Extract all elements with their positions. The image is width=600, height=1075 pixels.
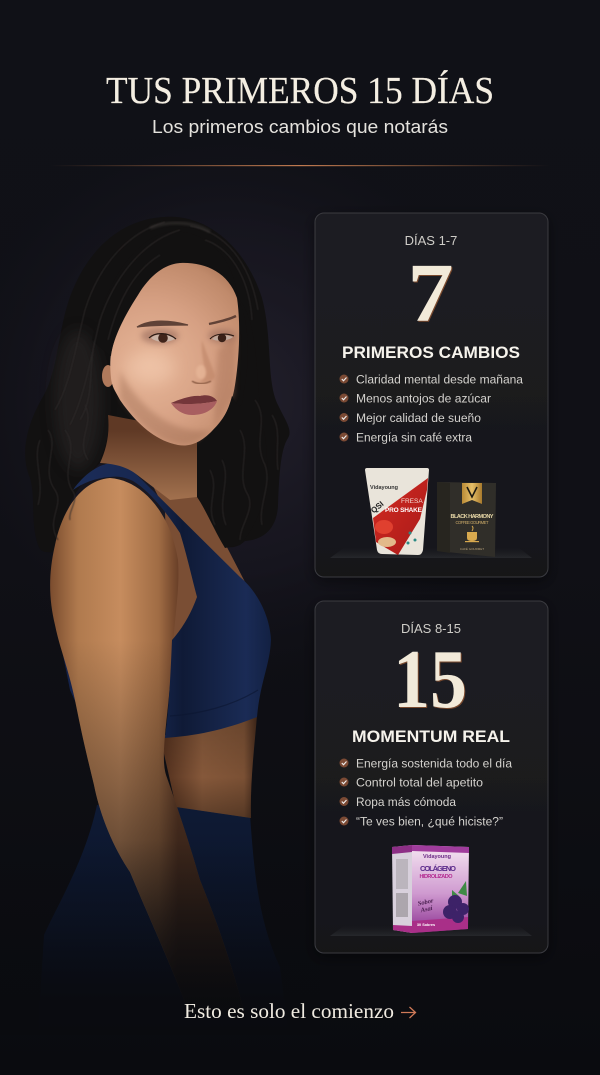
- back of top: [60, 640, 80, 712]
- item 4: Energía sin café extra: [356, 430, 472, 444]
- product: Black Harmony box: [437, 482, 496, 557]
- subtitle: Los primeros cambios que notarás: [152, 117, 448, 137]
- product: Pro Shake pouch: PRO SHAKE: [385, 507, 423, 514]
- card background: [315, 601, 548, 953]
- header divider: [50, 165, 550, 166]
- card background: [315, 213, 548, 577]
- midriff: [160, 716, 257, 818]
- product: collagen box: [392, 845, 469, 933]
- neck: [100, 415, 197, 500]
- closing call to action: Esto es solo el comienzo: [184, 999, 394, 1023]
- item 1: Claridad mental desde mañana: [356, 372, 523, 386]
- product shelf: [330, 547, 532, 558]
- hair sheen: [54, 330, 102, 470]
- arrow: [401, 1007, 416, 1018]
- period label: DÍAS 1-7: [405, 233, 457, 248]
- right cheek shade: [214, 335, 236, 428]
- top band shading: [170, 690, 258, 716]
- right eyebrow: [209, 316, 236, 324]
- item 3: Mejor calidad de sueño: [356, 411, 481, 425]
- cheek highlight: [126, 352, 174, 384]
- product: collagen box: Asaí: [419, 905, 434, 914]
- product: Black Harmony box: CAFÉ GOURMET: [460, 546, 484, 551]
- product: collagen box: 30 Sobres: [417, 923, 435, 927]
- bottom fade: [0, 840, 320, 1035]
- product: collagen box: Sobor: [417, 897, 435, 908]
- big number 15: 15: [393, 633, 467, 726]
- item 3: Ropa más cómoda: [356, 795, 456, 809]
- jaw shadow: [120, 370, 212, 444]
- right eye: [208, 329, 236, 343]
- nose: [192, 340, 215, 384]
- item 2: Menos antojos de azúcar: [356, 392, 491, 406]
- item 1: Energía sostenida todo el día: [356, 756, 512, 770]
- period label: DÍAS 8-15: [401, 621, 461, 636]
- product: collagen box: COLÁGENO: [420, 864, 456, 873]
- photo: woman in navy sportswear: [0, 217, 320, 1035]
- back hair: [25, 217, 290, 552]
- product: Pro Shake pouch: [365, 468, 429, 555]
- item 2: Control total del apetito: [356, 776, 483, 790]
- product: Pro Shake pouch: Vidayoung: [370, 485, 398, 491]
- product: collagen box: HIDROLIZADO: [420, 874, 453, 880]
- big number 15: 15: [394, 634, 468, 727]
- product: Pro Shake pouch: FRESA: [401, 498, 423, 505]
- leggings: [38, 800, 288, 1030]
- face: [110, 263, 239, 445]
- panel: days 8-15: [315, 601, 548, 953]
- heading: MOMENTUM REAL: [352, 727, 510, 746]
- heading: PRIMEROS CAMBIOS: [342, 343, 520, 362]
- left eye: [141, 328, 179, 344]
- checklist: [340, 756, 512, 828]
- product: Black Harmony box: COFFEE GOURMET: [456, 520, 489, 525]
- big number 7: 7: [408, 248, 454, 341]
- title: TUS PRIMEROS 15 DÍAS: [106, 70, 494, 112]
- left eyebrow: [137, 321, 188, 327]
- product: Black Harmony box: BLACK HARMONY: [450, 514, 494, 520]
- big number 7: 7: [408, 247, 454, 340]
- front hair: [37, 222, 278, 548]
- hair strands: [37, 222, 278, 540]
- checklist: [340, 372, 523, 444]
- product shelf: [330, 925, 532, 936]
- chest skin: [150, 480, 245, 645]
- sports top: [73, 463, 271, 738]
- panel: days 1-7: [315, 213, 548, 577]
- lips: [171, 395, 217, 415]
- item 4: “Te ves bien, ¿qué hiciste?”: [356, 814, 503, 828]
- product: collagen box: Vidayoung: [423, 854, 451, 860]
- ear: [102, 365, 114, 387]
- arm and shoulder: [50, 478, 245, 1015]
- product: Pro Shake pouch: QSI: [369, 499, 385, 515]
